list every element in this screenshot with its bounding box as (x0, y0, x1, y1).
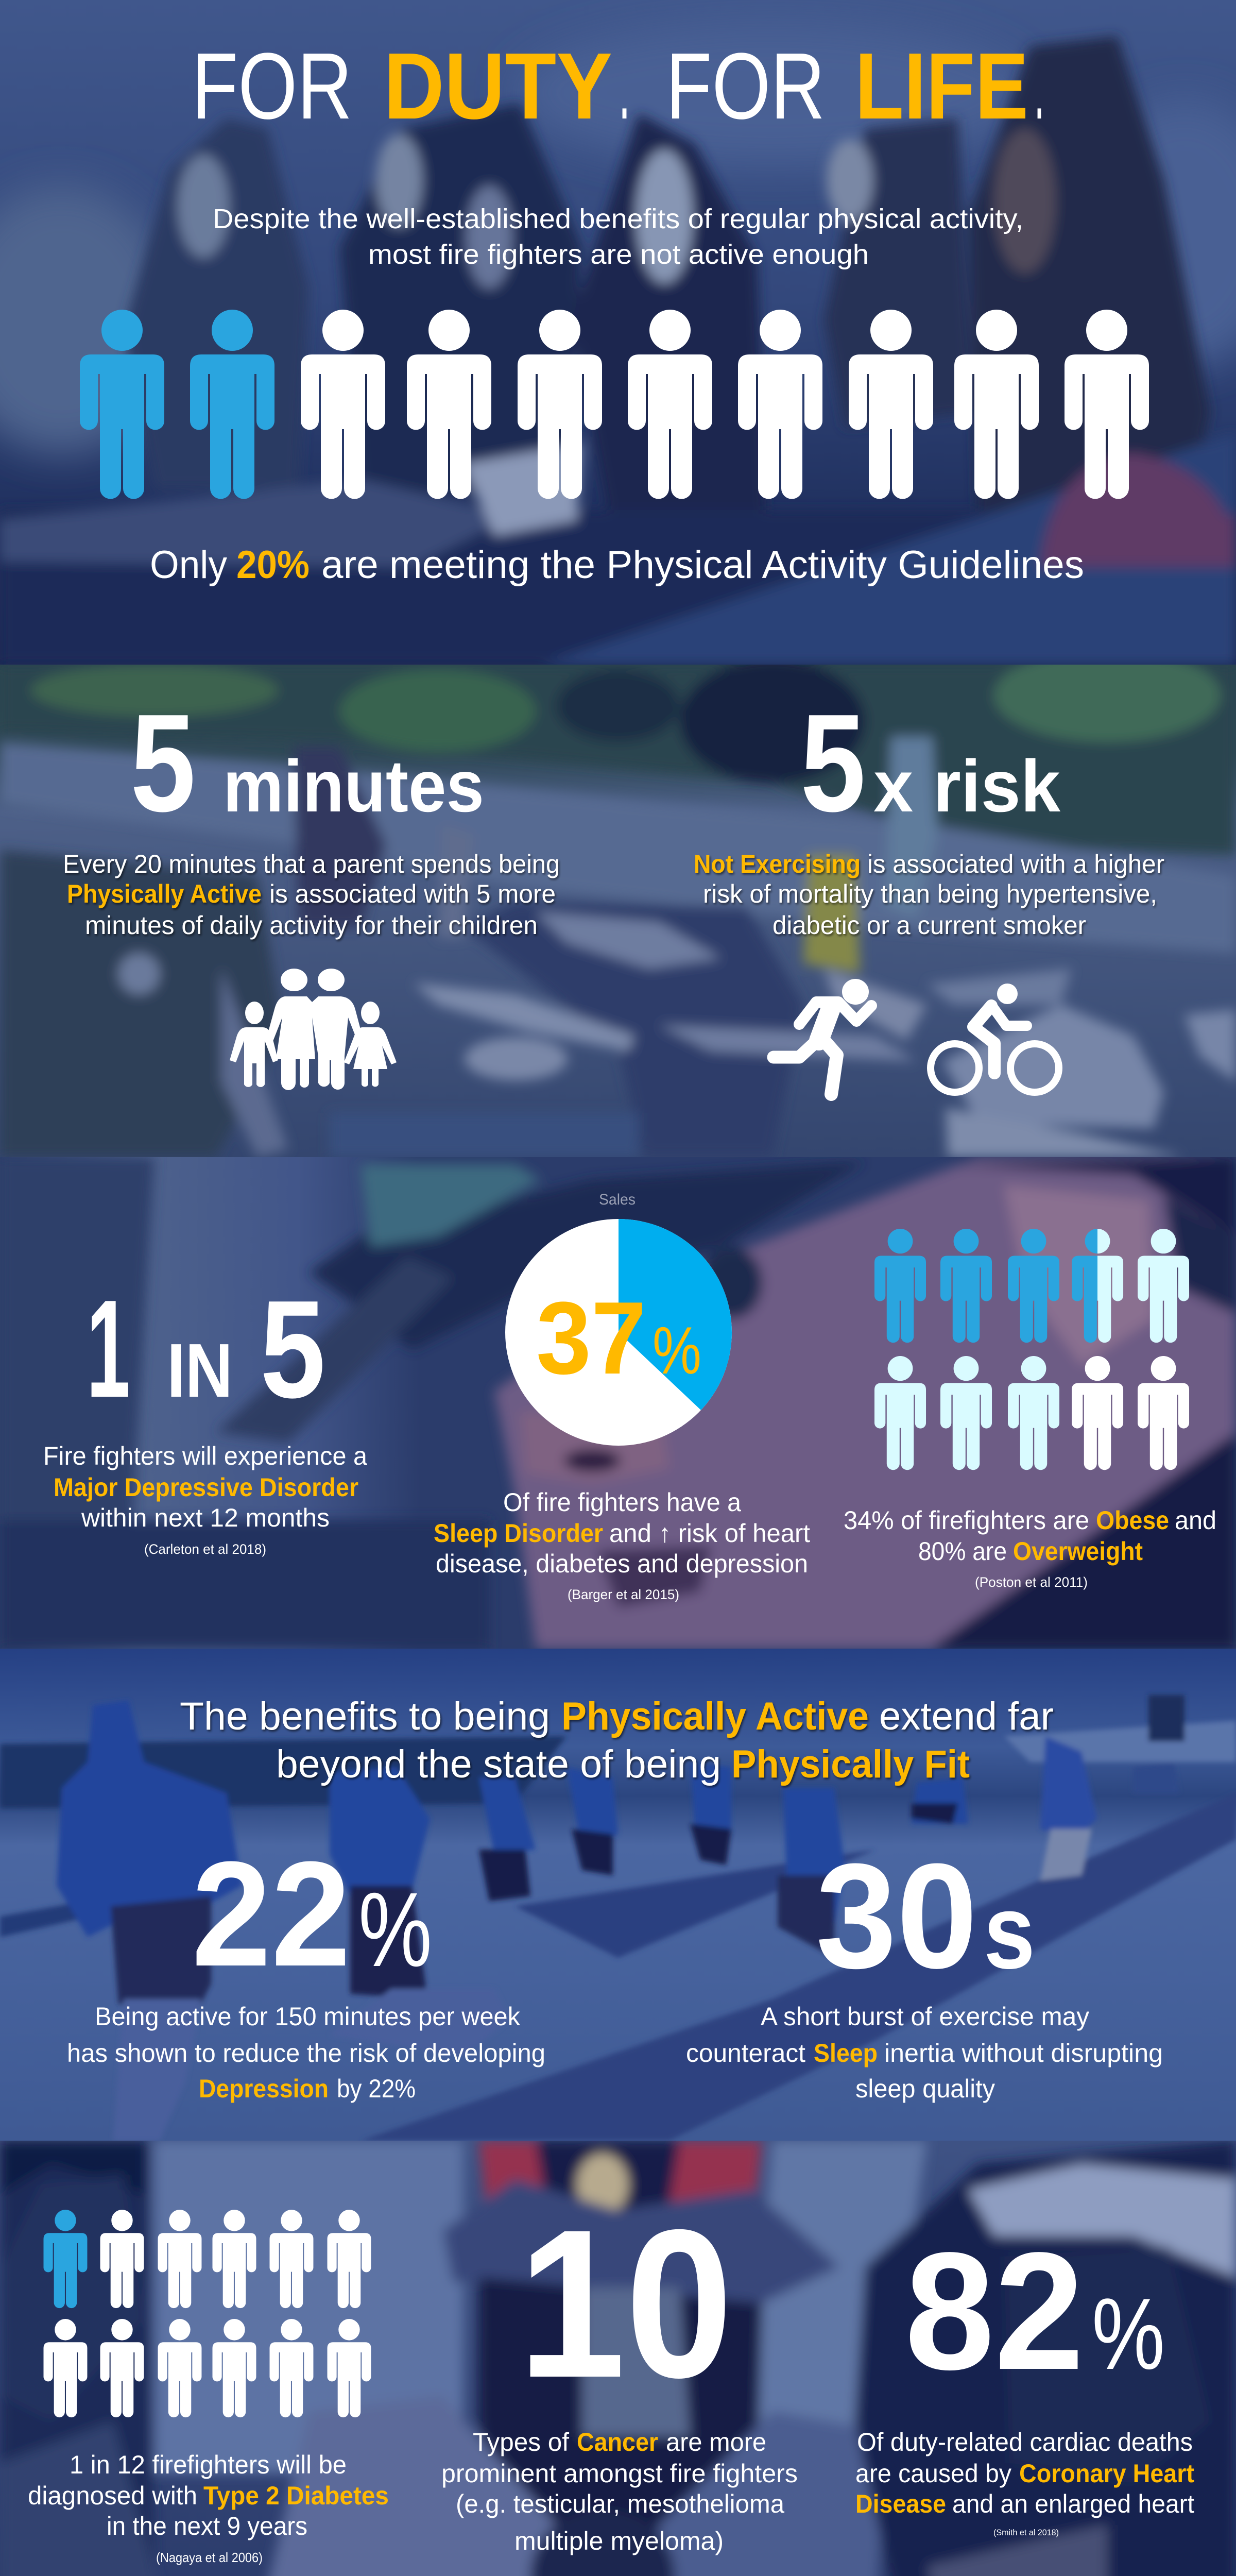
stat: 22 percent: % (358, 1871, 432, 1989)
intro text: Despite the well-established benefits of regular physical activity, (213, 204, 1023, 234)
pie chart: 37 percent sleep disorder: 37 (536, 1281, 646, 1396)
text block: not exercising: Not Exercising (694, 850, 861, 878)
text block: sleep disorder: (Barger et al 2015) (568, 1587, 679, 1602)
panel: fire fighter close-up background (0, 1157, 1236, 1649)
stat line: only 20 percent: 20% (236, 543, 310, 587)
pie chart: 37 percent sleep disorder: Sales (599, 1191, 636, 1208)
title: DUTY (384, 33, 612, 139)
text block: cancer types: Cancer (577, 2428, 658, 2456)
text block: cancer types: prominent amongst fire fighters (441, 2459, 798, 2488)
panel: family by the river background (0, 665, 1236, 1157)
text block: parent activity: Physically Active (67, 879, 262, 908)
stat: 5x risk (800, 686, 1060, 841)
stat: 5 minutes: minutes (223, 745, 484, 827)
stat line: only 20 percent: Only (150, 543, 227, 587)
heading: benefits: extend far (879, 1694, 1054, 1738)
text block: major depressive disorder: Fire fighters will experience a (43, 1442, 367, 1470)
text block: type 2 diabetes: diagnosed with (28, 2481, 197, 2510)
text block: coronary heart disease: and an enlarged heart (952, 2489, 1194, 2518)
text block: major depressive disorder (43, 1442, 367, 1557)
text block: obese and overweight (844, 1506, 1216, 1590)
heading: benefits: Physically Active (561, 1694, 869, 1738)
text block: sleep disorder: and ↑ risk of heart (609, 1519, 810, 1548)
text block: not exercising (694, 850, 1164, 940)
pictogram: obese and overweight fire fighters (874, 1229, 1189, 1470)
text block: cancer types: (e.g. testicular, mesothelioma (456, 2489, 784, 2518)
text block: coronary heart disease: are caused by (855, 2459, 1011, 2488)
panel: hero background, firefighters in smoke (0, 0, 1236, 665)
text: . (1034, 33, 1044, 139)
text block: sleep inertia: inertia without disrupting (884, 2039, 1163, 2067)
text block: sleep inertia (686, 2002, 1163, 2103)
title: FOR (666, 33, 825, 139)
stat: 82 percent: 82 (905, 2217, 1084, 2404)
text block: parent activity: minutes of daily activity for their children (85, 911, 538, 940)
text block: sleep inertia: counteract (686, 2039, 805, 2067)
text block: obese and overweight: 80% are (918, 1537, 1007, 1566)
heading: benefits: beyond the state of being (276, 1742, 721, 1786)
text block: cancer types: multiple myeloma) (514, 2527, 724, 2555)
pie chart: 37 percent sleep disorder (505, 1191, 732, 1446)
text block: parent activity: Every 20 minutes that a parent spends being (63, 850, 560, 878)
text block: type 2 diabetes: 1 in 12 firefighters will be (70, 2450, 347, 2479)
text block: not exercising: risk of mortality than being hypertensive, (703, 879, 1157, 908)
title: FOR (192, 33, 352, 139)
icon: cyclist (931, 984, 1059, 1092)
text block: sleep disorder: Of fire fighters have a (503, 1488, 741, 1517)
text block: sleep inertia: sleep quality (855, 2074, 995, 2103)
text block: depression: has shown to reduce the risk of developing (67, 2039, 545, 2067)
text block: obese and overweight: (Poston et al 2011) (975, 1574, 1088, 1590)
text block: coronary heart disease: Disease (855, 2489, 946, 2518)
text block: cancer types: Types of (473, 2428, 569, 2456)
text block: not exercising: diabetic or a current smoker (772, 911, 1086, 940)
stat: 22 percent: 22 (192, 1831, 351, 1997)
pie chart: 37 percent sleep disorder: % (653, 1313, 701, 1388)
panel: masked fire fighters background (0, 2141, 1236, 2576)
intro text: most fire fighters are not active enough (368, 239, 869, 270)
stat: 1 in 5: 5 (260, 1272, 325, 1427)
title: . (619, 33, 630, 139)
text block: sleep disorder: Sleep Disorder (434, 1519, 603, 1548)
text block: not exercising: is associated with a higher (867, 850, 1164, 878)
text block: coronary heart disease (855, 2428, 1194, 2537)
text block: type 2 diabetes (28, 2450, 389, 2565)
stat: 5x risk: 5 (800, 686, 866, 841)
text block: coronary heart disease: (Smith et al 2018) (993, 2528, 1059, 2537)
text block: major depressive disorder: within next 12 months (81, 1503, 330, 1532)
stat: 5 minutes (130, 686, 484, 841)
text block: obese and overweight: 34% of firefighters are (844, 1506, 1089, 1535)
text block: depression: Being active for 150 minutes per week (95, 2002, 521, 2031)
heading: benefits: The benefits to being (180, 1694, 550, 1738)
text block: depression: Depression (199, 2074, 329, 2103)
text block: obese and overweight: Overweight (1013, 1537, 1143, 1566)
pictogram: 1 in 12 firefighters (43, 2210, 371, 2417)
text block: parent activity: is associated with 5 more (269, 879, 556, 908)
text block: obese and overweight: and (1175, 1506, 1216, 1535)
stat: 30 seconds: s (984, 1873, 1035, 1991)
heading: benefits: Physically Fit (731, 1742, 970, 1786)
stat: 30 seconds: 30 (816, 1833, 977, 1999)
title: LIFE (855, 33, 1028, 139)
pictogram: 2 of 10 fire fighters active (80, 310, 1149, 499)
text block: sleep inertia: A short burst of exercise may (761, 2002, 1089, 2031)
text block: cancer types: are more (666, 2428, 766, 2456)
heading: benefits (180, 1694, 1054, 1786)
stat: 5x risk: x risk (873, 745, 1060, 827)
text block: type 2 diabetes: (Nagaya et al 2006) (156, 2550, 263, 2565)
text block: sleep disorder: disease, diabetes and depression (436, 1549, 808, 1578)
text block: major depressive disorder: Major Depressive Disorder (54, 1473, 358, 1502)
icon: family (230, 969, 397, 1090)
intro text (213, 204, 1023, 270)
text block: major depressive disorder: (Carleton et al 2018) (144, 1541, 266, 1557)
text block: coronary heart disease: Coronary Heart (1019, 2459, 1194, 2488)
stat: 1 in 5 (87, 1272, 325, 1427)
stat: 5 minutes: 5 (130, 686, 196, 841)
stat: 1 in 5: IN (167, 1328, 233, 1413)
stat: 10 types of cancer: 10 (518, 2185, 733, 2421)
text block: coronary heart disease: Of duty-related cardiac deaths (857, 2428, 1193, 2456)
stat: 22 percent (192, 1831, 432, 1997)
text block: parent activity (63, 850, 560, 940)
stat: 1 in 5: 1 (87, 1272, 130, 1427)
text block: sleep disorder (434, 1488, 810, 1602)
stat: 82 percent: % (1092, 2277, 1165, 2391)
text block: depression (67, 2002, 545, 2103)
text block: obese and overweight: Obese (1096, 1506, 1169, 1535)
text block: type 2 diabetes: Type 2 Diabetes (203, 2481, 389, 2510)
text block: type 2 diabetes: in the next 9 years (107, 2512, 307, 2540)
text block: cancer types (441, 2428, 798, 2555)
text block: depression: by 22% (337, 2074, 416, 2103)
panel: beach running background (0, 1649, 1236, 2141)
stat line: only 20 percent: are meeting the Physical Activity Guidelines (321, 543, 1084, 587)
text block: sleep inertia: Sleep (814, 2039, 878, 2067)
icon: runner (774, 979, 871, 1094)
